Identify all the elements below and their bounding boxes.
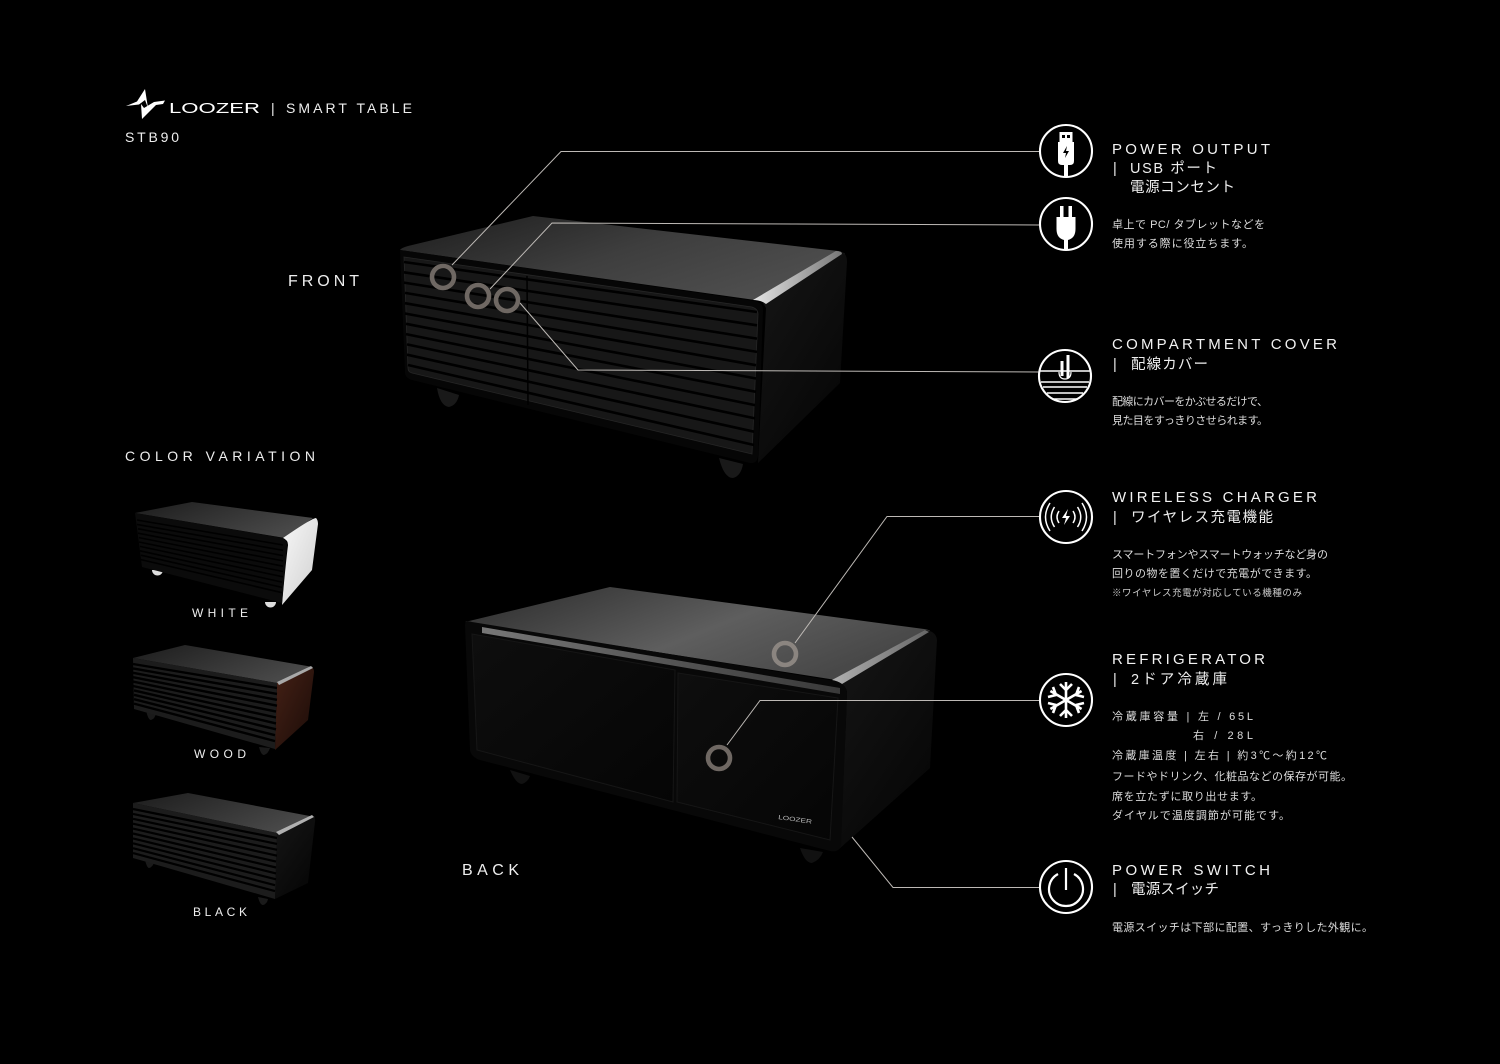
- icon: power switch: [1040, 861, 1092, 913]
- feature: power switch: [1112, 862, 1373, 934]
- description line 1: 配線にカバーをかぶせるだけで、: [1112, 395, 1268, 408]
- feet: [146, 710, 270, 755]
- subheading: |: [1113, 510, 1117, 526]
- top surface: [133, 793, 315, 833]
- side highlight: [277, 666, 313, 685]
- heading: WIRELESS CHARGER: [1112, 489, 1317, 506]
- product image: back view table: [465, 587, 937, 863]
- feature: wireless charger: [1112, 489, 1328, 599]
- heading: REFRIGERATOR: [1112, 651, 1265, 668]
- slats: [133, 809, 277, 891]
- leader line: power output: [452, 152, 1040, 265]
- side highlight: [832, 630, 929, 684]
- door seam: [527, 276, 528, 405]
- description: 電源スイッチは下部に配置、すっきりした外観に。: [1112, 920, 1373, 934]
- leader line: wireless charger: [795, 516, 1040, 643]
- front view label: FRONT: [288, 273, 359, 290]
- feature: compartment cover: [1112, 336, 1337, 427]
- description line 1: フードやドリンク、化粧品などの保存が可能。: [1112, 769, 1352, 783]
- front face: [133, 803, 277, 899]
- subheading second line: 電源コンセント: [1130, 179, 1235, 196]
- icon: snowflake: [1040, 674, 1092, 726]
- product image: front view table: [400, 216, 847, 478]
- leader line: power switch: [852, 837, 1040, 888]
- description line 1: スマートフォンやスマートウォッチなど身の: [1112, 547, 1328, 561]
- callout rings: [432, 266, 796, 769]
- slats: [133, 664, 277, 741]
- capacity right: 右 / 28L: [1193, 728, 1253, 742]
- description line 3: ダイヤルで温度調節が可能です。: [1112, 808, 1290, 822]
- capacity left: 冷蔵庫容量 | 左 / 65L: [1112, 709, 1253, 723]
- product name text: SMART TABLE: [286, 100, 412, 116]
- model number: STB90: [125, 129, 179, 145]
- feature: power output: [1112, 141, 1270, 250]
- side panel: [282, 518, 318, 605]
- subheading: USB ポート: [1130, 160, 1217, 177]
- logo wordmark: LOOZER: [169, 100, 260, 117]
- feature: refrigerator: [1112, 651, 1352, 822]
- name: BLACK: [193, 905, 247, 919]
- light strip: [482, 627, 840, 694]
- subheading: 電源スイッチ: [1131, 881, 1219, 898]
- louvered front face: [400, 250, 763, 463]
- subheading: 配線カバー: [1131, 356, 1208, 373]
- description line 1: 卓上で PC/ タブレットなどを: [1112, 217, 1265, 231]
- heading: POWER OUTPUT: [1112, 141, 1270, 158]
- subheading: |: [1113, 357, 1117, 373]
- color variant: white: [135, 502, 318, 620]
- side highlight: [753, 251, 842, 304]
- subheading: |: [1113, 161, 1117, 177]
- color variation heading: COLOR VARIATION: [125, 448, 315, 464]
- icon: compartment cover: [1039, 350, 1091, 402]
- slats: [137, 520, 283, 593]
- subheading: 2ドア冷蔵庫: [1131, 671, 1227, 688]
- side panel: [833, 630, 937, 850]
- back view label: BACK: [462, 862, 519, 879]
- side panel: [275, 816, 315, 899]
- description line 2: 使用する際に役立ちます。: [1112, 236, 1253, 250]
- color variant: wood: [133, 645, 314, 761]
- leader line: outlet: [490, 223, 1040, 289]
- top surface: [135, 502, 313, 538]
- feet: [152, 570, 276, 608]
- name: WHITE: [192, 606, 248, 620]
- description line 2: 席を立たずに取り出せます。: [1112, 789, 1262, 803]
- top surface: [400, 216, 845, 302]
- heading: POWER SWITCH: [1112, 862, 1270, 879]
- description line 2: 見た目をすっきりさせられます。: [1112, 414, 1268, 427]
- icon: usb plug: [1040, 125, 1092, 177]
- product name divider: |: [271, 100, 275, 116]
- heading: COMPARTMENT COVER: [1112, 336, 1337, 353]
- feet: [437, 388, 743, 478]
- door logo: LOOZER: [778, 815, 813, 826]
- name: WOOD: [194, 747, 246, 761]
- side panel: [275, 667, 314, 750]
- top surface: [133, 645, 313, 683]
- side highlight: [276, 815, 314, 835]
- footnote: ※ワイヤレス充電が対応している機種のみ: [1112, 587, 1302, 599]
- feet: [145, 860, 268, 905]
- front face: [465, 621, 847, 851]
- side panel: [758, 252, 847, 463]
- description line 2: 回りの物を置くだけで充電ができます。: [1112, 566, 1317, 580]
- left door: [472, 634, 675, 802]
- brand header: [125, 89, 412, 145]
- leader line: compartment cover: [520, 303, 1040, 372]
- leader line: refrigerator: [727, 700, 1040, 745]
- louver slats: [404, 262, 757, 445]
- subheading: |: [1113, 882, 1117, 898]
- front face: [135, 513, 287, 603]
- front face: [133, 658, 277, 749]
- feet: [510, 770, 823, 863]
- logo mark: [126, 89, 165, 119]
- icon: power plug: [1040, 198, 1092, 250]
- louver panel: [404, 257, 758, 454]
- temperature: 冷蔵庫温度 | 左右 | 約3℃～約12℃: [1112, 748, 1327, 762]
- icon: wireless charger: [1040, 491, 1092, 543]
- subheading: |: [1113, 672, 1117, 688]
- color variant: black: [133, 793, 315, 919]
- subheading: ワイヤレス充電機能: [1131, 509, 1274, 526]
- right door: [677, 673, 838, 840]
- top surface: [465, 587, 930, 680]
